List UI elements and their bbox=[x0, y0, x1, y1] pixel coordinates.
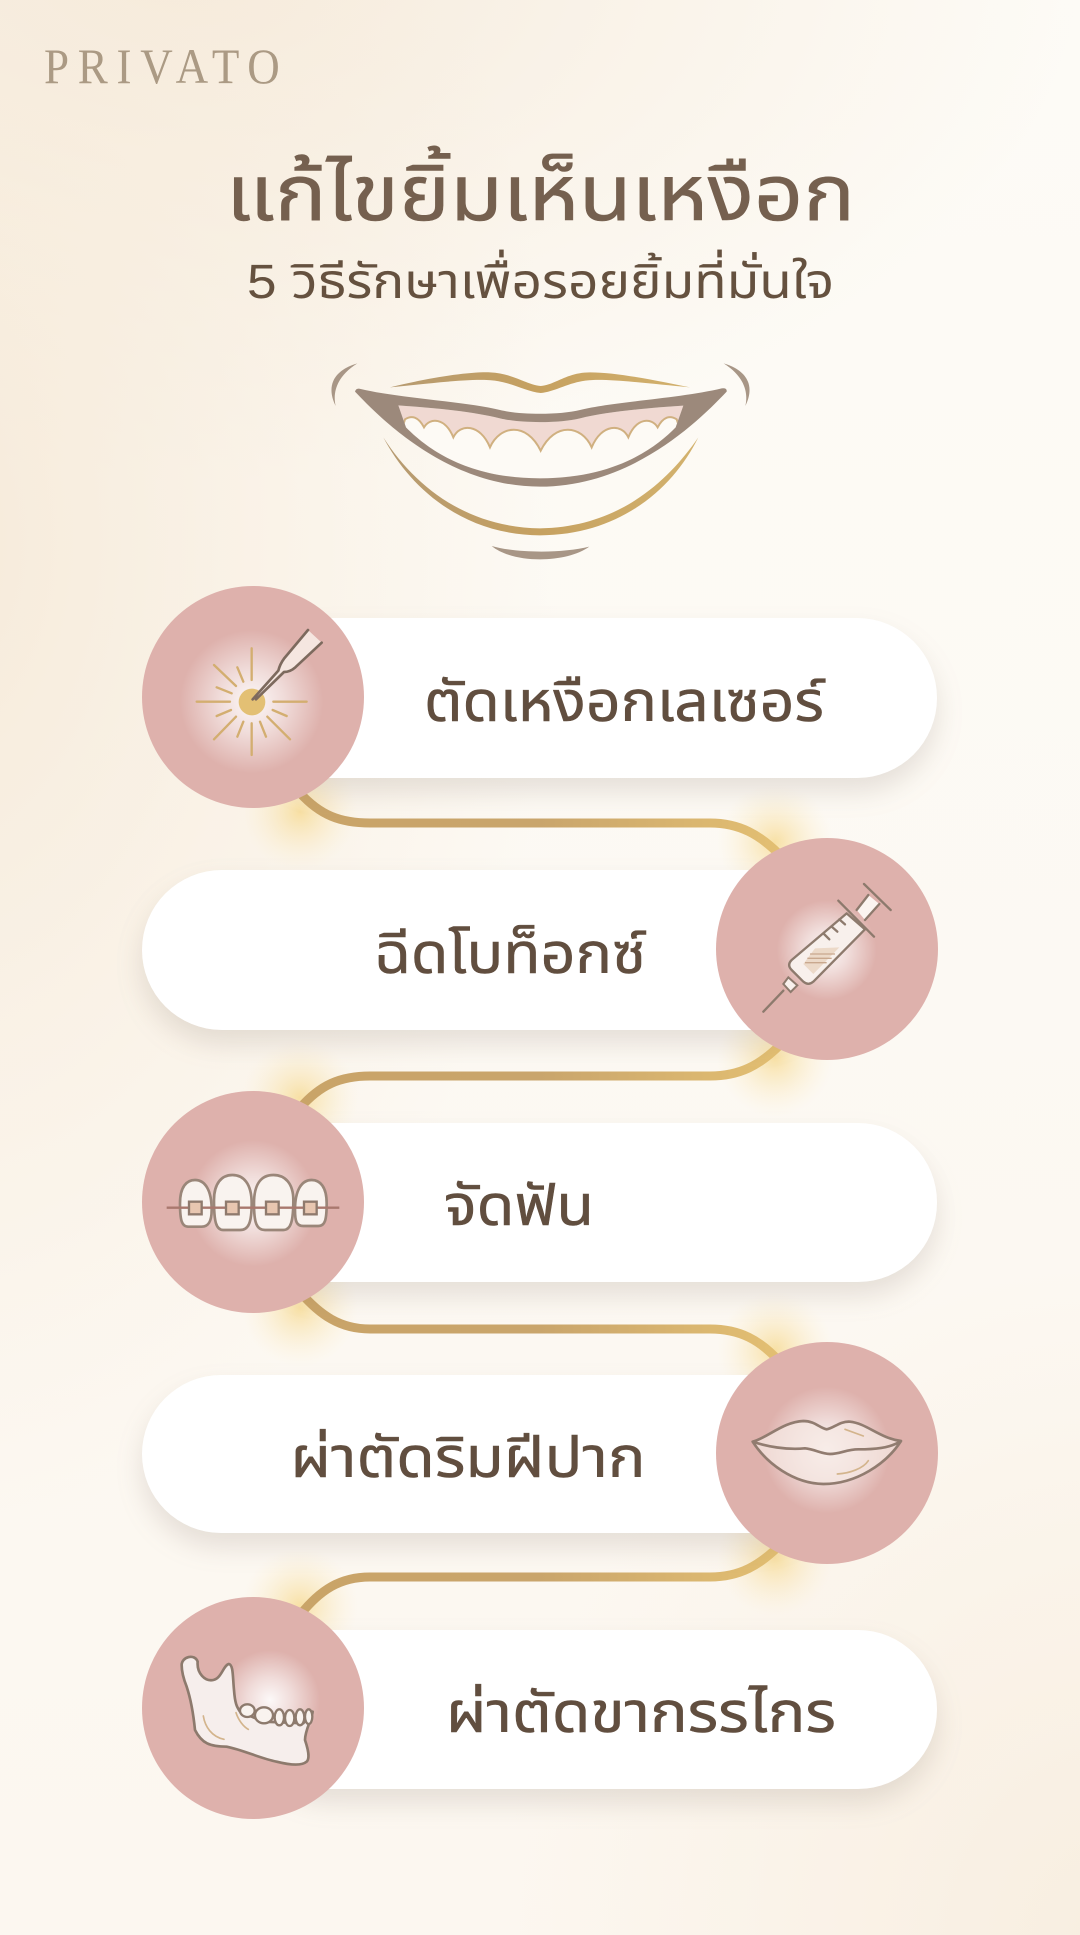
pill 1 bbox=[250, 618, 937, 778]
pill 4 bbox=[142, 1375, 832, 1533]
circle 2 bbox=[716, 838, 938, 1060]
label 1: ตัดเหงือกเลเซอร์ bbox=[424, 670, 826, 733]
circle 4 bbox=[716, 1342, 938, 1564]
connectors bbox=[300, 793, 780, 1615]
circle 5 bbox=[142, 1597, 364, 1819]
title: แก้ไขยิ้มเห็นเหงือก bbox=[226, 146, 855, 237]
smile illustration bbox=[331, 363, 750, 559]
step 4: lip surgery bbox=[142, 1342, 938, 1564]
icon: syringe bbox=[763, 884, 891, 1012]
label 5: ผ่าตัดขากรรไกร bbox=[446, 1681, 836, 1744]
label 4: ผ่าตัดริมฝีปาก bbox=[290, 1426, 646, 1489]
infographic canvas bbox=[45, 50, 942, 1819]
circle 3 bbox=[142, 1091, 364, 1313]
icon: braces bbox=[167, 1140, 339, 1267]
icon: laser bbox=[180, 630, 323, 773]
label 3: จัดฟัน bbox=[444, 1174, 594, 1237]
subtitle: 5 วิธีรักษาเพื่อรอยยิ้มที่มั่นใจ bbox=[247, 249, 834, 309]
pill 2 bbox=[142, 870, 832, 1030]
circle 1 bbox=[142, 586, 364, 808]
step 3: braces bbox=[142, 1091, 937, 1313]
connector glows bbox=[242, 754, 833, 1664]
step 2: botox bbox=[142, 838, 938, 1060]
icon: lips bbox=[753, 1387, 901, 1513]
icon: jaw bbox=[182, 1650, 320, 1765]
label 2: ฉีดโบท็อกซ์ bbox=[374, 922, 646, 985]
logo: PRIVATO bbox=[44, 40, 280, 95]
pill 3 bbox=[250, 1123, 937, 1282]
pill 5 bbox=[250, 1630, 937, 1789]
step 1: laser gum surgery bbox=[142, 586, 937, 808]
step 5: jaw surgery bbox=[142, 1597, 937, 1819]
